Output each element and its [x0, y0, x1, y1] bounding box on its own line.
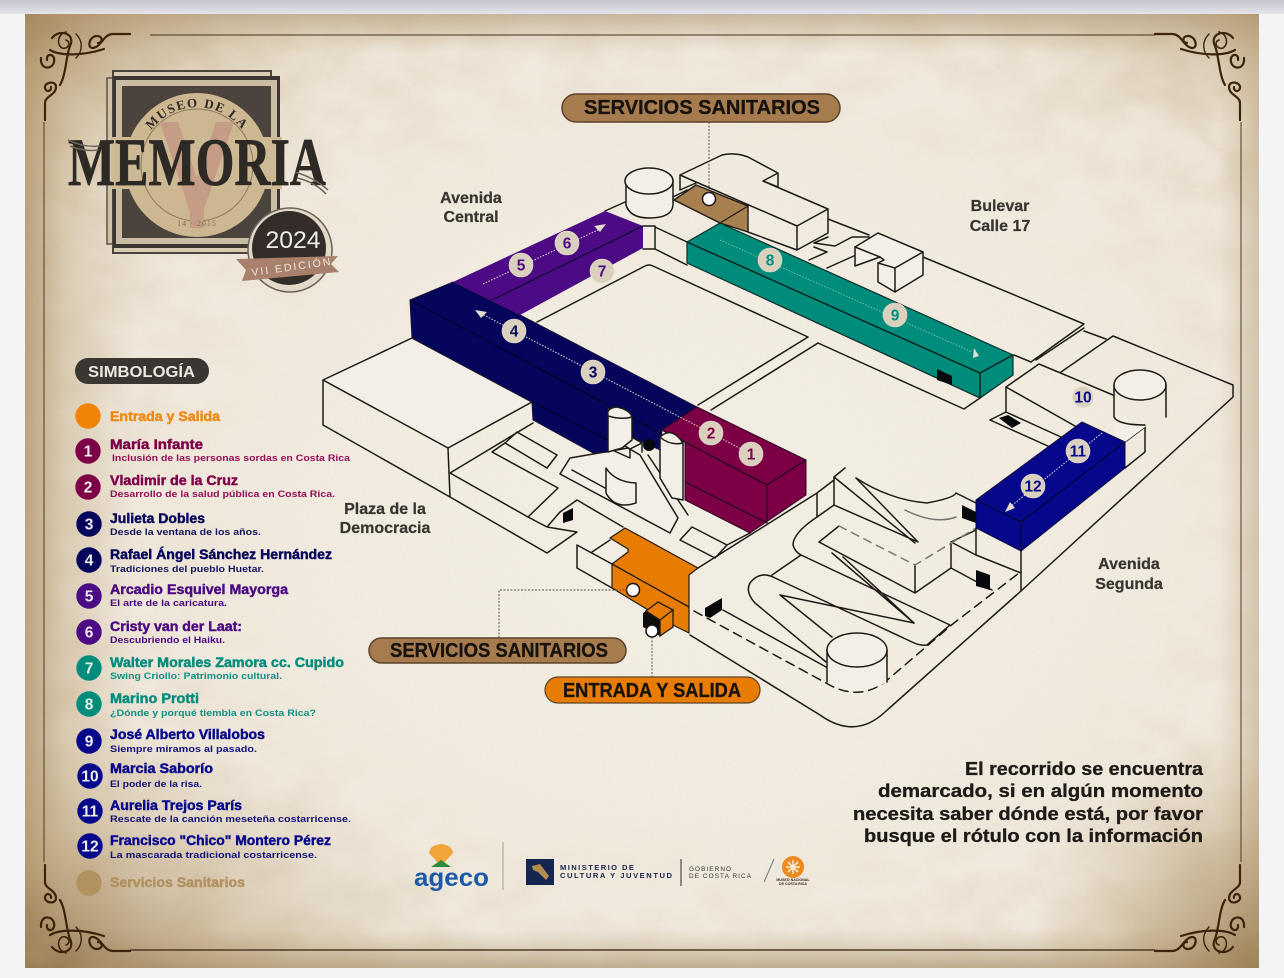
corner ornament bottom left: [41, 865, 130, 953]
map number badges: 12: [1024, 478, 1042, 496]
map zone: blue rooms 11 and 12: [976, 422, 1125, 551]
legend: 7: Swing Criollo: Patrimonio cultural.: [110, 671, 282, 682]
map number badges: [502, 231, 1094, 498]
logo: Museo Nacional: [776, 856, 810, 886]
legend: 10: 10: [81, 768, 99, 786]
legend: 11: Aurelia Trejos París: [110, 798, 242, 813]
map zone: orange entrance: [610, 528, 698, 636]
street label: Avenida Central: Avenida: [440, 190, 502, 207]
logo: Museo Nacional: MUSEO NACIONAL: [776, 878, 810, 882]
legend: servicios sanitarios: Servicios Sanitarios: [110, 875, 245, 890]
pill: entrada y salida: ENTRADA Y SALIDA: [563, 680, 741, 702]
route note: busque el rótulo con la información: [864, 826, 1203, 846]
badge 2024: VII EDICIÓN: [251, 255, 333, 279]
legend: 4: [76, 547, 332, 575]
legend: 2: [75, 473, 335, 500]
legend: 2: 2: [84, 480, 92, 496]
legend: 1: Inclusión de las personas sordas en Costa Rica: [112, 453, 351, 464]
legend: 8: 8: [85, 696, 94, 714]
legend: 6: [76, 619, 242, 646]
map number badges: 2: [707, 426, 715, 442]
corner ornament top right: [1155, 32, 1244, 120]
map zone: maroon rooms 1 and 2: [662, 407, 806, 533]
legend: 7: Walter Morales Zamora cc. Cupido: [110, 655, 344, 670]
map number badges: 1: [747, 446, 756, 464]
route note: demarcado, si en algún momento: [878, 781, 1203, 801]
divider: [502, 842, 504, 890]
logo: Ministerio de Cultura y Juventud: CULTURA Y JUVENTUD: [560, 871, 673, 880]
map number badges: 5: [517, 258, 526, 274]
map number badges: 4: [510, 324, 519, 340]
bottom cylinder on ramp: [827, 633, 887, 690]
legend: 2: Vladimir de la Cruz: [110, 473, 238, 488]
map number badges: 10: [1074, 390, 1092, 406]
street label: Plaza de la Democracia: Democracia: [340, 520, 430, 537]
pill: servicios sanitarios top: [562, 94, 840, 122]
street label: Avenida Segunda: Segunda: [1095, 576, 1163, 593]
pill: servicios sanitarios top: SERVICIOS SANITARIOS: [584, 97, 820, 119]
logo: Ministerio de Cultura y Juventud: DE COSTA RICA: [689, 873, 752, 880]
legend: 3: Julieta Dobles: [110, 511, 205, 526]
badge 2024: [236, 208, 339, 292]
map number badges: 3: [589, 364, 598, 382]
legend: [75, 403, 351, 896]
legend: 3: Desde la ventana de los años.: [110, 527, 261, 538]
logo: Ministerio de Cultura y Juventud: [526, 859, 774, 886]
legend: 10: Marcia Saborío: [110, 761, 213, 776]
street label: Bulevar Calle 17: Bulevar: [971, 198, 1029, 215]
logo: Museo de la Memoria: 14 · 2015: [177, 219, 217, 228]
route note: El recorrido se encuentra: [965, 759, 1204, 779]
route note: [853, 759, 1204, 846]
legend: 5: El arte de la caricatura.: [110, 598, 227, 609]
legend: servicios sanitarios: [76, 870, 245, 896]
legend: 4: 4: [85, 552, 94, 570]
legend: 6: 6: [85, 624, 94, 642]
map number badges: 9: [891, 308, 900, 324]
logo: Ministerio de Cultura y Juventud: MINISTERIO DE: [560, 863, 634, 872]
map number badges: 7: [598, 264, 606, 280]
street label: Avenida Central: Central: [443, 209, 499, 226]
legend: 6: Descubriendo el Haiku.: [110, 635, 225, 646]
legend: 12: 12: [81, 838, 99, 856]
legend: 7: 7: [85, 660, 93, 678]
logo: Museo de la Memoria: MUSEO DE LA: [145, 98, 246, 130]
map number badges: 11: [1070, 444, 1087, 460]
logo: Museo Nacional: DE COSTA RICA: [779, 882, 807, 886]
legend: 5: Arcadio Esquivel Mayorga: [110, 582, 289, 597]
legend: 12: [77, 833, 331, 861]
map zone: teal rooms 8 and 9: [687, 223, 1013, 398]
legend: 4: Rafael Ángel Sánchez Hernández: [110, 547, 332, 562]
legend: 9: José Alberto Villalobos: [110, 727, 265, 742]
legend: 4: Tradiciones del pueblo Huetar.: [110, 564, 264, 575]
pill: servicios sanitarios bottom: SERVICIOS SANITARIOS: [390, 640, 608, 662]
legend: 10: [77, 761, 213, 790]
legend: 8: Marino Protti: [110, 691, 199, 706]
logo: ageco: [414, 844, 489, 892]
legend: 7: [76, 655, 344, 682]
legend: 3: 3: [85, 516, 94, 534]
legend: 10: El poder de la risa.: [110, 779, 202, 790]
legend: 11: 11: [82, 804, 99, 820]
legend: 5: [76, 582, 289, 609]
legend: 1: [75, 437, 351, 464]
logo: Museo de la Memoria: MEMORIA: [68, 124, 326, 200]
map zone: purple rooms 5, 6 and 7: [453, 211, 643, 315]
logo: Ministerio de Cultura y Juventud: GOBIERNO: [689, 866, 731, 873]
route note: necesita saber dónde está, por favor: [853, 804, 1203, 824]
legend: 8: [76, 691, 316, 719]
restroom and entrance markers: [626, 192, 716, 637]
legend: 6: Cristy van der Laat:: [110, 619, 242, 634]
legend: 9: Siempre miramos al pasado.: [110, 744, 257, 755]
legend: 8: ¿Dónde y porqué tiembla en Costa Rica?: [110, 708, 316, 719]
legend: 12: La mascarada tradicional costarricense.: [110, 850, 317, 861]
corner ornament top left: [41, 32, 130, 120]
legend: entrada y salida: [75, 403, 221, 429]
legend: 9: 9: [85, 734, 94, 750]
legend: 2: Desarrollo de la salud pública en Costa Rica.: [110, 489, 335, 500]
map number badges: 6: [563, 236, 572, 252]
map zone: navy rooms 3 and 4: [410, 282, 697, 453]
street label: Bulevar Calle 17: Calle 17: [970, 218, 1030, 235]
legend: 1: María Infante: [110, 437, 204, 452]
leader lines: [499, 122, 709, 677]
legend heading: SIMBOLOGÍA: [88, 362, 195, 381]
legend: 1: 1: [84, 444, 93, 460]
street label: Plaza de la Democracia: Plaza de la: [344, 501, 426, 518]
black door markers: [563, 369, 1021, 618]
map base outlines: [323, 154, 1233, 727]
route arrows: [475, 224, 1102, 512]
legend: 9: [76, 727, 265, 755]
street label: Avenida Segunda: Avenida: [1098, 556, 1160, 573]
logo: ageco: ageco: [414, 864, 489, 892]
logo: Museo de la Memoria: [68, 70, 339, 293]
legend: 12: Francisco "Chico" Montero Pérez: [110, 833, 331, 848]
map zone: brown restrooms north: [674, 185, 748, 232]
legend: 11: Rescate de la canción meseteña costarricense.: [110, 814, 351, 825]
map number badges: 8: [766, 252, 775, 270]
legend: 3: [76, 511, 261, 538]
legend: 5: 5: [85, 588, 94, 606]
badge 2024: 2024: [266, 227, 320, 254]
legend: 11: [77, 798, 351, 825]
legend heading: [75, 358, 209, 384]
legend: entrada y salida: Entrada y Salida: [110, 409, 221, 424]
corner ornament bottom right: [1155, 865, 1244, 953]
white cylinders at museum entrance: [608, 407, 683, 500]
